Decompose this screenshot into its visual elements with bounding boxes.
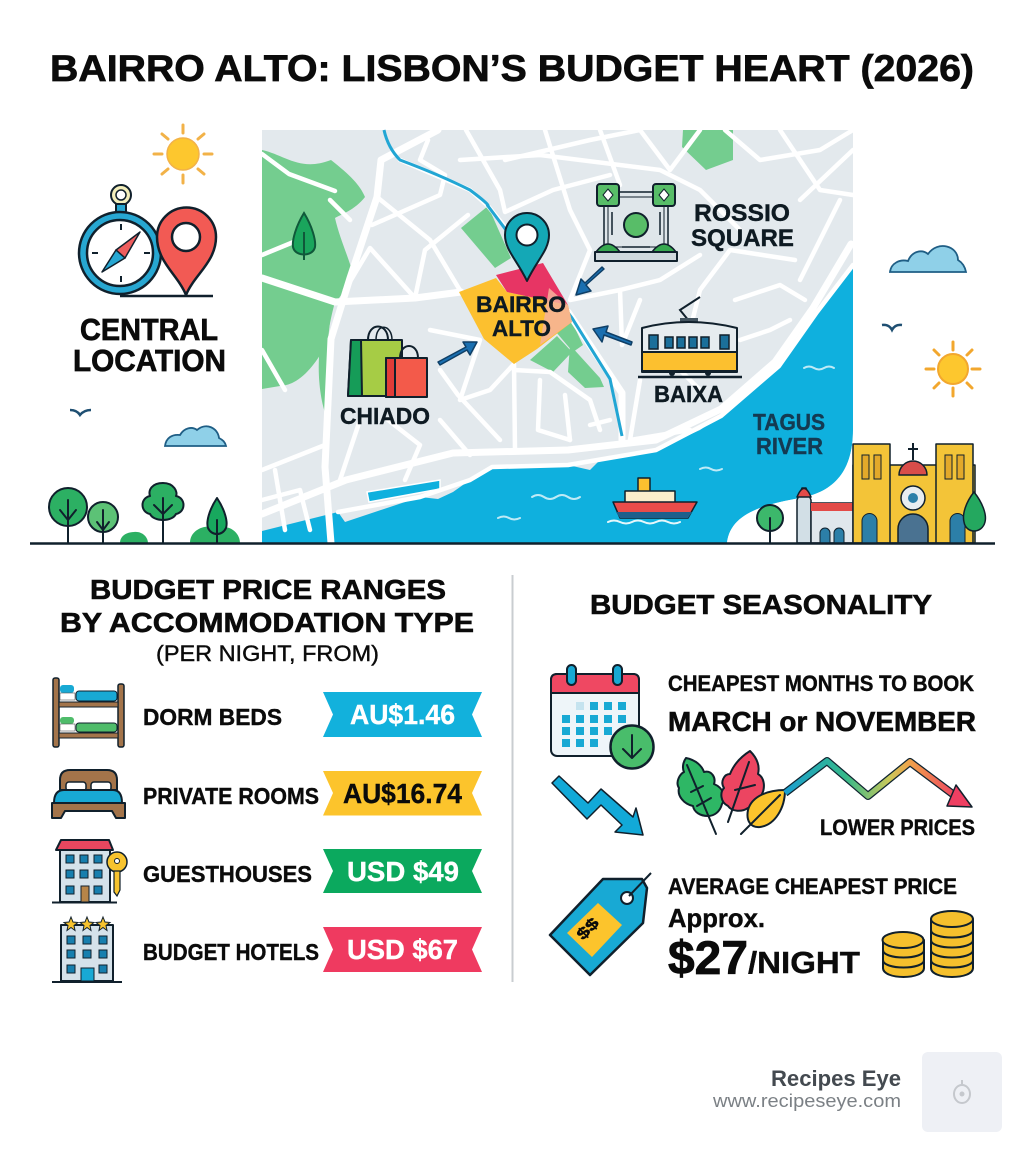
footer brand: Recipes Eye xyxy=(771,1066,901,1091)
arrow: blue zigzag down xyxy=(552,776,643,835)
arrow: Baixa to Bairro Alto xyxy=(593,326,632,345)
canal xyxy=(384,130,622,436)
price ribbon: USD $67: USD $67 xyxy=(347,934,458,965)
row: private rooms xyxy=(52,770,482,818)
logo tile xyxy=(922,1052,1002,1132)
text: average cheapest price: Approx. xyxy=(668,903,765,933)
icon: Rossio Square xyxy=(595,184,677,261)
text: Rossio Square: ROSSIO xyxy=(694,200,790,227)
icon: trees left xyxy=(49,483,240,543)
title: BAIRRO ALTO: LISBON’S BUDGET HEART (2026) xyxy=(50,48,974,89)
icon: coin stacks xyxy=(882,911,973,977)
chart: price trend arrow xyxy=(785,761,972,807)
heading: budget price ranges xyxy=(60,574,474,666)
map panel xyxy=(262,130,853,543)
icon: double bed xyxy=(52,770,125,818)
text: average cheapest price: /NIGHT xyxy=(748,945,860,980)
text: lower prices: LOWER PRICES xyxy=(820,815,975,840)
icon: cloud left xyxy=(165,426,226,446)
icon: calendar xyxy=(551,665,654,768)
row: guesthouses: GUESTHOUSES xyxy=(143,861,312,887)
text: average cheapest price: AVERAGE CHEAPEST PRICE xyxy=(668,874,957,899)
icon: compass and pin xyxy=(79,185,216,296)
footer brand: www.recipeseye.com xyxy=(712,1091,901,1111)
row: guesthouses xyxy=(52,840,482,902)
text: Bairro Alto: BAIRRO xyxy=(476,292,566,317)
icon: bird right xyxy=(882,325,902,330)
icon: Baixa tram xyxy=(638,297,742,377)
price ribbon: AU$16.74 xyxy=(323,771,482,816)
text: Rossio Square: SQUARE xyxy=(691,225,794,252)
price ribbon: AU$16.74: AU$16.74 xyxy=(343,778,462,809)
heading: budget seasonality: BUDGET SEASONALITY xyxy=(590,589,932,620)
price ribbon: AU$1.46: AU$1.46 xyxy=(350,699,455,730)
icon: ferry xyxy=(608,478,697,524)
heading: Central Location: LOCATION xyxy=(73,343,226,378)
parks xyxy=(262,130,733,425)
tree beside river xyxy=(757,505,783,543)
ground line xyxy=(30,542,995,545)
icon: cloud right xyxy=(890,246,966,272)
icon: Chiado shopping bags xyxy=(348,326,427,397)
price ribbon: USD $49: USD $49 xyxy=(347,856,459,887)
river waves xyxy=(498,366,834,520)
text: cheapest months xyxy=(668,671,976,737)
icon: park tree xyxy=(293,213,315,260)
text: Tagus River: RIVER xyxy=(756,433,823,459)
white coastal corner xyxy=(727,430,853,543)
icon: bunk bed xyxy=(53,678,124,747)
row: dorm beds xyxy=(53,678,482,747)
icon: cathedral and buildings xyxy=(757,443,985,543)
text: average cheapest price: $27 xyxy=(668,931,748,984)
icon: sun right xyxy=(926,342,980,396)
river xyxy=(262,265,853,543)
vertical divider xyxy=(512,575,514,982)
label: Bairro Alto district xyxy=(459,263,572,364)
text: cheapest months: MARCH or NOVEMBER xyxy=(668,706,976,737)
row: budget hotels xyxy=(52,917,482,982)
icon: autumn leaves xyxy=(678,751,785,834)
text: Baixa: BAIXA xyxy=(654,381,723,407)
text: average cheapest price xyxy=(668,874,957,984)
icon: hotel with stars xyxy=(52,917,122,982)
price ribbon: USD $67 xyxy=(323,927,482,972)
arrow: Chiado to Bairro Alto xyxy=(438,342,477,365)
icon: bird left xyxy=(70,410,91,415)
text: Chiado: CHIADO xyxy=(340,403,430,429)
heading: budget price ranges: BY ACCOMMODATION TYPE xyxy=(60,607,474,638)
text: cheapest months: CHEAPEST MONTHS TO BOOK xyxy=(668,671,974,696)
pier basin xyxy=(367,480,440,502)
icon: guesthouse with key xyxy=(52,840,127,902)
row: private rooms: PRIVATE ROOMS xyxy=(143,783,319,809)
text: Tagus River xyxy=(753,409,825,459)
small building xyxy=(797,488,855,543)
heading: budget price ranges: (PER NIGHT, FROM) xyxy=(156,641,379,666)
price ribbon: USD $49 xyxy=(323,849,482,893)
row: dorm beds: DORM BEDS xyxy=(143,704,282,730)
heading: Central Location xyxy=(73,312,226,378)
heading: Central Location: CENTRAL xyxy=(80,312,218,347)
icon: price tag: $$ xyxy=(574,915,603,944)
price ribbon: AU$1.46 xyxy=(323,692,482,737)
text: Bairro Alto xyxy=(476,292,566,341)
arrow: Rossio to Bairro Alto xyxy=(576,267,604,295)
icon: sun left xyxy=(154,125,212,183)
text: Tagus River: TAGUS xyxy=(753,409,825,435)
icon: teal map pin xyxy=(505,213,549,281)
row: budget hotels: BUDGET HOTELS xyxy=(143,939,319,965)
street network xyxy=(262,130,853,543)
icon: price tag xyxy=(550,873,651,975)
text: Rossio Square xyxy=(691,200,794,252)
footer brand xyxy=(712,1052,1002,1132)
heading: budget price ranges: BUDGET PRICE RANGES xyxy=(90,574,446,605)
text: Bairro Alto: ALTO xyxy=(492,316,551,341)
